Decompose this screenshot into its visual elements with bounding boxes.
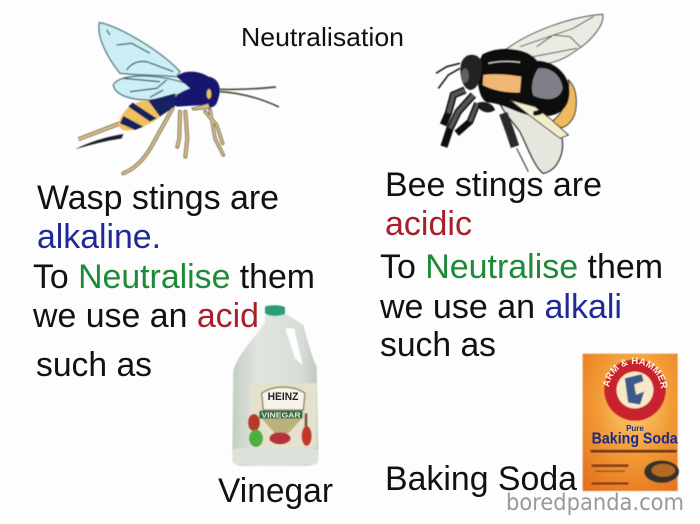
text block: bee stings: To Neutralise them xyxy=(380,248,663,286)
text block: wasp stings: such as xyxy=(36,346,152,384)
text block: wasp stings: Wasp stings are xyxy=(37,179,279,217)
text block: bee stings: we use an alkali xyxy=(379,288,622,326)
text block: wasp stings: To Neutralise them xyxy=(33,258,315,296)
sub: bee abdomen xyxy=(552,80,576,128)
icon: baking soda box xyxy=(582,352,680,492)
vinegar label: Vinegar xyxy=(218,472,333,510)
icon: vinegar bottle xyxy=(232,305,318,466)
icon: vinegar bottle: HEINZ xyxy=(268,391,299,403)
icon: baking soda box: ARM & HAMMER xyxy=(603,357,668,389)
text block: bee stings xyxy=(379,166,663,364)
title: Neutralisation xyxy=(241,22,404,52)
text block: bee stings: Bee stings are xyxy=(385,166,602,204)
icon: baking soda box: Pure xyxy=(626,424,644,433)
icon: bee xyxy=(436,14,603,173)
text block: bee stings: such as xyxy=(380,326,496,364)
watermark: boredpanda.com xyxy=(506,490,684,516)
baking soda label: Baking Soda xyxy=(385,460,577,498)
text block: wasp stings: we use an acid xyxy=(32,297,259,335)
icon: wasp xyxy=(75,23,279,173)
text block: wasp stings: alkaline. xyxy=(37,218,161,256)
icon: vinegar bottle: VINEGAR xyxy=(261,410,301,419)
sub: wasp legs xyxy=(123,108,223,173)
text block: bee stings: acidic xyxy=(385,205,472,243)
icon: baking soda box: Baking Soda xyxy=(592,430,678,447)
text block: wasp stings xyxy=(32,179,315,384)
